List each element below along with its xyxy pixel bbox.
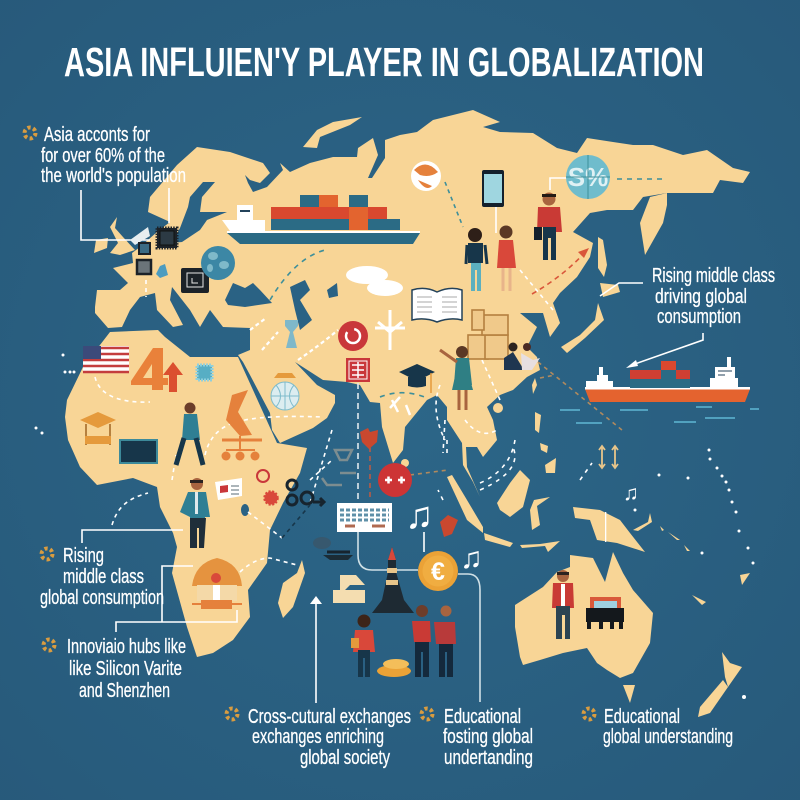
- icon: orange temple: [192, 558, 242, 609]
- icon: clouds: [346, 266, 403, 296]
- icon: orange round emblem: [411, 161, 441, 191]
- icon: teal globe: [201, 246, 235, 280]
- icon: red hand: [440, 515, 458, 537]
- land: Eurasia: [95, 110, 750, 497]
- icon: monitor: [120, 440, 157, 463]
- icon: orange figure machine: [222, 390, 262, 460]
- icon: euro coin: [418, 551, 458, 591]
- text: population callout: the world's population: [41, 165, 186, 187]
- icon: red badges: [257, 470, 278, 504]
- icon: woman in black: [466, 228, 487, 291]
- leader: east callout: [600, 283, 643, 296]
- text: population callout: Asia acconts for: [44, 124, 150, 146]
- bullet: innovation: [44, 640, 54, 650]
- icon: graduation stand: [80, 412, 116, 445]
- text: cross-cultural exchanges: Cross-cutural exchanges: [248, 706, 411, 728]
- icon: red heart emblem: [360, 428, 378, 449]
- text: rising middle class east: driving global: [655, 286, 747, 308]
- text: population callout: for over 60% of the: [41, 145, 165, 167]
- icon: seated people: [504, 342, 540, 370]
- icon: two-way arrows: [599, 446, 618, 468]
- icon: beige stamp: [333, 575, 365, 603]
- dashed route arrows: [95, 179, 663, 572]
- icon: calendar keyboard: [337, 503, 392, 532]
- icon: large cargo ship: [222, 195, 420, 244]
- bullet: educational right: [584, 708, 594, 720]
- icon: container ship east: [585, 357, 750, 402]
- icon: red square emblem: [346, 358, 370, 382]
- icon: woman in red: [497, 226, 516, 291]
- leader: note to coin: [423, 532, 425, 552]
- water lines: [560, 407, 759, 423]
- bullet: population: [24, 128, 36, 138]
- leader lines: rising middle class west: [82, 530, 237, 632]
- icon: microchips: [137, 228, 208, 292]
- text: educational understanding: global understanding: [603, 726, 733, 748]
- text: rising middle class west: [40, 545, 164, 609]
- text: innovation hubs: [67, 636, 186, 702]
- icon: globe with hat: [271, 373, 299, 410]
- land: Africa: [65, 330, 307, 657]
- text: population callout: [41, 124, 186, 187]
- icon: music note far: ♫: [623, 482, 639, 505]
- icon: table with case: [586, 597, 624, 629]
- icon: white marks on India: [390, 397, 410, 415]
- icon: dark vehicle: [313, 537, 353, 560]
- bullet: cross-cultural: [226, 708, 238, 720]
- icon: lighthouse tower: [372, 547, 414, 613]
- land: islands: [94, 117, 750, 717]
- text: educational fostering: Educational: [444, 706, 521, 728]
- inland seas: [172, 182, 338, 516]
- world map landmasses: [65, 110, 750, 717]
- text: rising middle class east: [652, 265, 775, 328]
- text: rising middle class west: middle class: [63, 566, 144, 588]
- text: innovation hubs: and Shenzhen: [79, 680, 170, 702]
- icon: teal currency globe: S%: [568, 162, 608, 192]
- text: educational understanding: Educational: [604, 706, 680, 728]
- icon: man in red sweater: [534, 192, 562, 260]
- icon: Australian businessman: [552, 570, 574, 639]
- bullet: educational centre: [422, 708, 432, 720]
- leader: man to globe: [550, 178, 566, 190]
- icon: woman with folder: [351, 614, 375, 677]
- text: rising middle class west: Rising: [63, 545, 104, 567]
- text: rising middle class east: consumption: [657, 306, 741, 328]
- arrow: callout to ship: [626, 333, 703, 368]
- Pacific island dots: [34, 354, 754, 699]
- icon: woman in red with man: [412, 605, 456, 677]
- icon: stacked boxes: [468, 310, 508, 359]
- icon: walking woman: [176, 402, 203, 465]
- icon: faded ocean marks: [322, 450, 356, 485]
- text: innovation hubs: like Silicon Varite: [69, 658, 182, 680]
- text: educational fostering: fosting global: [443, 726, 533, 748]
- icon: open book: [412, 288, 462, 322]
- icon: cyan chip: [197, 365, 212, 380]
- text: cross-cultural exchanges: exchanges enriching: [252, 726, 384, 748]
- arrow: cross-cultural up arrow: [310, 596, 322, 703]
- icon: businessman: [180, 478, 210, 548]
- text: innovation hubs: Innoviaio hubs like: [67, 636, 186, 658]
- icon: small blue marker: [156, 264, 168, 278]
- icon: red plus circle: [378, 463, 412, 497]
- leader lines: population: [81, 188, 169, 240]
- icon: woman with raised arm: [440, 346, 473, 410]
- icon: coin stack: [377, 659, 411, 677]
- icon: euro coin: €: [431, 558, 445, 586]
- icon: white map marker: [130, 227, 150, 245]
- text: cross-cultural exchanges: global society: [300, 747, 390, 769]
- icon: teal currency globe: [566, 155, 610, 199]
- icon: document: [215, 478, 242, 500]
- leader lines: coin connectors: [358, 532, 480, 702]
- icon: graduation cap: [399, 364, 435, 393]
- icon: music note right: ♫: [460, 542, 482, 575]
- icon: red roundel: [338, 321, 368, 351]
- text: rising middle class west: global consumption: [40, 587, 164, 609]
- text: educational understanding: [603, 706, 733, 748]
- bullet: rising west: [42, 548, 52, 560]
- icon: white ornaments: [375, 310, 405, 350]
- icon: watch tower: [285, 320, 298, 348]
- text: educational fostering: [443, 706, 533, 769]
- text: educational fostering: undertanding: [444, 747, 533, 769]
- icon: music note left: ♫: [405, 495, 434, 537]
- icon: gears: [287, 480, 324, 506]
- text: cross-cultural exchanges: [248, 706, 411, 769]
- icon: orange 4 with arrow: [131, 348, 183, 392]
- icon: smartphone: [482, 170, 504, 207]
- icon: US flag: [83, 346, 129, 373]
